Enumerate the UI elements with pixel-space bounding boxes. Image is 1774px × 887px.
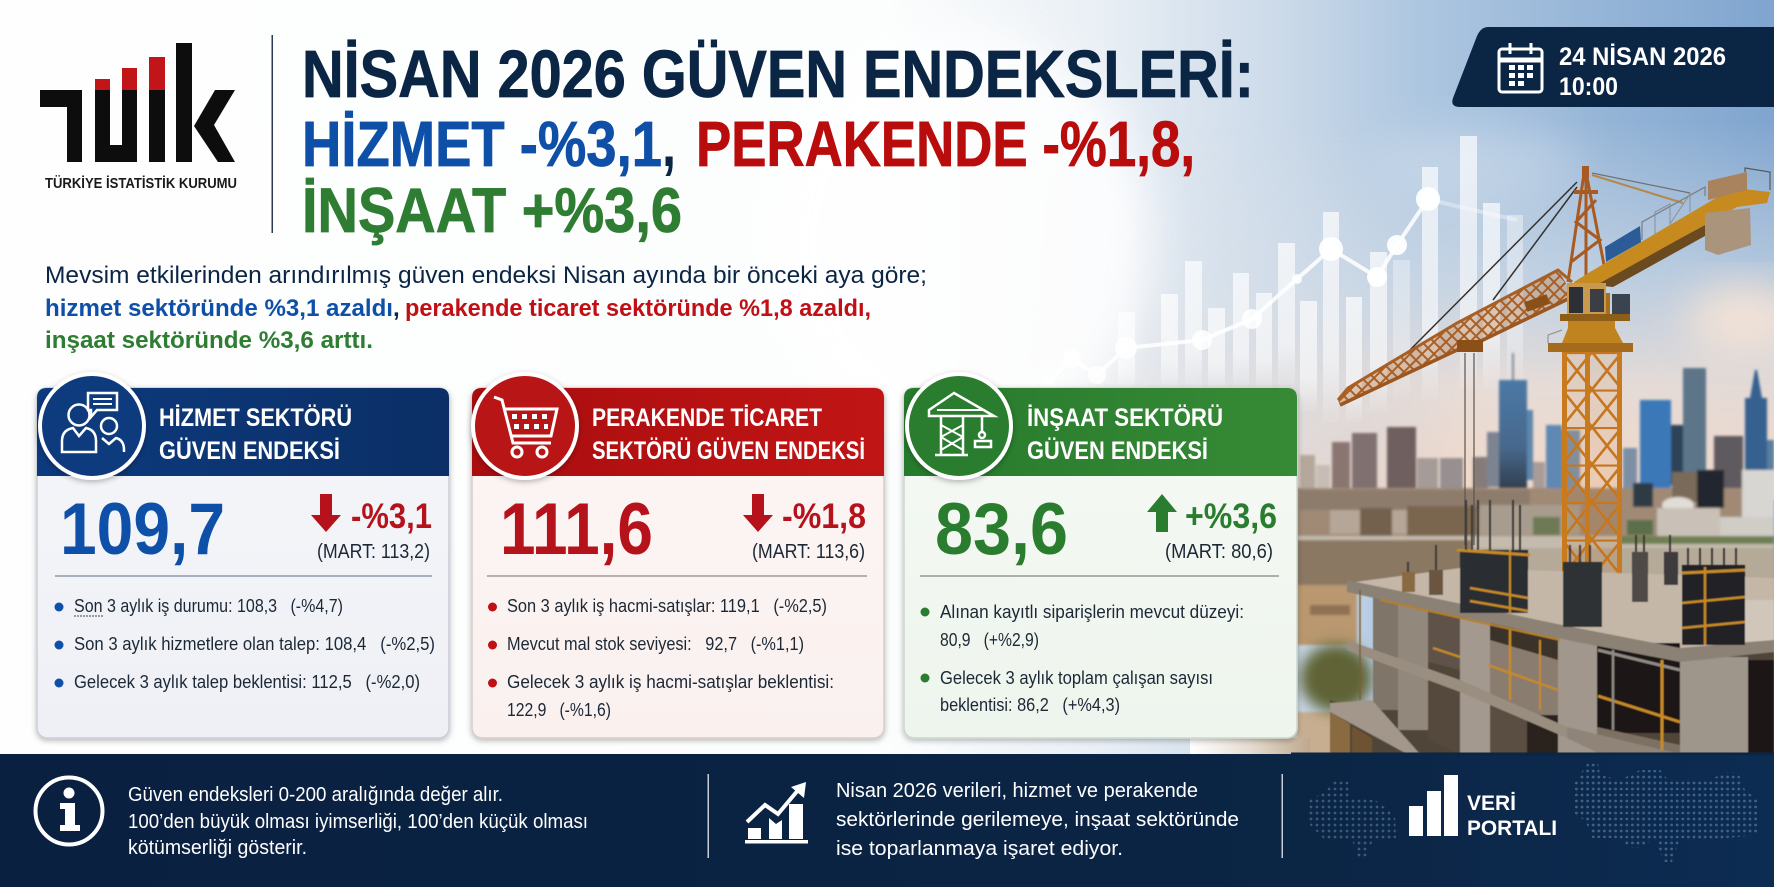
title: İNŞAAT +%3,6 [302, 176, 682, 246]
panel: hizmet sektörü: GÜVEN ENDEKSİ [159, 436, 340, 465]
panel: perakende ticaret sektörü: (MART: 113,6) [752, 541, 865, 563]
intro paragraph: hizmet sektöründe %3,1 azaldı [45, 295, 393, 322]
footer band [0, 752, 1774, 887]
panel: perakende ticaret sektörü: PERAKENDE TİCARET [592, 404, 822, 432]
footer note: index range [128, 784, 588, 859]
panel: inşaat sektörü: beklentisi: 86,2 (+%4,3) [940, 695, 1120, 715]
title: PERAKENDE -%1,8, [696, 108, 1195, 180]
date badge: 24 NİSAN 2026 [1559, 43, 1726, 71]
panel: hizmet sektörü: 109,7 [60, 489, 225, 570]
panel: hizmet sektörü: Gelecek 3 aylık talep beklentisi: 112,5 (-%2,0) [74, 672, 420, 692]
intro paragraph: perakende ticaret sektöründe %1,8 azaldı, [405, 295, 871, 322]
title [302, 37, 1254, 246]
panel: hizmet sektörü: -%3,1 [351, 497, 432, 536]
veri portalı logo: VERİ [1467, 792, 1516, 815]
panel: perakende ticaret sektörü: Son 3 aylık iş hacmi-satışlar: 119,1 (-%2,5) [507, 596, 827, 616]
logo: TÜİK: TÜRKİYE İSTATİSTİK KURUMU [45, 175, 237, 192]
panel: inşaat sektörü: Alınan kayıtlı siparişlerin mevcut düzeyi: [940, 602, 1244, 622]
panel: perakende ticaret sektörü: SEKTÖRÜ GÜVEN ENDEKSİ [592, 436, 865, 465]
title: NİSAN 2026 GÜVEN ENDEKSLERİ: [302, 37, 1254, 112]
date badge [1452, 27, 1774, 107]
intro paragraph: Mevsim etkilerinden arındırılmış güven endeksi Nisan ayında bir önceki aya göre; [45, 262, 927, 289]
icon: shopping cart [473, 374, 577, 478]
panel: inşaat sektörü: GÜVEN ENDEKSİ [1027, 436, 1208, 465]
icon: info [36, 778, 102, 844]
panel: hizmet sektörü: Son 3 aylık hizmetlere olan talep: 108,4 (-%2,5) [74, 634, 435, 654]
title: , [662, 108, 676, 180]
panel: hizmet sektörü: Son 3 aylık iş durumu: 108,3 (-%4,7) [74, 596, 343, 616]
panel: perakende ticaret sektörü: 122,9 (-%1,6) [507, 700, 611, 720]
dotted map: left [1308, 780, 1396, 857]
panel: perakende ticaret sektörü [472, 374, 884, 738]
panel: perakende ticaret sektörü: Mevcut mal stok seviyesi: 92,7 (-%1,1) [507, 634, 804, 654]
title: HİZMET -%3,1 [302, 108, 662, 180]
footer note: index range: kötümserliği gösterir. [128, 837, 307, 859]
under-construction concrete building [1330, 500, 1774, 754]
icon: up arrow [1147, 494, 1177, 532]
trees beside the building [1300, 644, 1372, 712]
intro paragraph [45, 262, 927, 354]
date badge: 10:00 [1559, 73, 1618, 101]
faint rising bar and line chart [1041, 136, 1523, 422]
panel: perakende ticaret sektörü: -%1,8 [782, 497, 866, 536]
icon: construction crane [907, 374, 1011, 478]
panel: inşaat sektörü: 83,6 [935, 489, 1068, 570]
footer note: index range: Güven endeksleri 0-200 aralığında değer alır. [128, 784, 503, 806]
footer note: summary: Nisan 2026 verileri, hizmet ve perakende [836, 780, 1198, 802]
footer note: index range: 100’den büyük olması iyimserliği, 100’den küçük olması [128, 811, 588, 833]
panel: inşaat sektörü: İNŞAAT SEKTÖRÜ [1027, 403, 1223, 432]
icon: down arrow [743, 494, 773, 532]
tower crane [1338, 166, 1770, 578]
dotted map: right [1574, 763, 1758, 862]
icon: rising chart [745, 782, 808, 844]
veri portalı logo: PORTALI [1467, 817, 1557, 840]
panel: hizmet sektörü: (MART: 113,2) [317, 541, 430, 563]
logo: TÜİK [40, 43, 237, 192]
footer note: summary: sektörlerinde gerilemeye, inşaat sektöründe [836, 809, 1239, 831]
panel: inşaat sektörü: +%3,6 [1185, 497, 1277, 536]
background photo: city skyline and ground [1297, 353, 1774, 754]
panel: inşaat sektörü: Gelecek 3 aylık toplam çalışan sayısı [940, 668, 1213, 688]
panel: inşaat sektörü: 80,9 (+%2,9) [940, 630, 1039, 650]
icon: down arrow [311, 494, 341, 532]
panel: hizmet sektörü: HİZMET SEKTÖRÜ [159, 403, 352, 432]
footer note: summary [836, 780, 1239, 860]
footer note: summary: ise toparlanmaya işaret ediyor. [836, 838, 1123, 860]
ground fade under cards [1190, 738, 1310, 754]
intro paragraph: , [393, 295, 400, 322]
veri portalı logo [1409, 775, 1557, 840]
logo divider [272, 35, 273, 233]
panel: hizmet sektörü [37, 374, 449, 738]
background: sky [944, 0, 1774, 754]
panel: perakende ticaret sektörü: Gelecek 3 aylık iş hacmi-satışlar beklentisi: [507, 672, 834, 692]
panel: perakende ticaret sektörü: 111,6 [500, 489, 653, 570]
panel: inşaat sektörü: (MART: 80,6) [1165, 541, 1273, 563]
intro paragraph: inşaat sektöründe %3,6 arttı. [45, 327, 373, 354]
panel: inşaat sektörü [904, 374, 1297, 738]
icon: people with speech bubble [40, 374, 144, 478]
